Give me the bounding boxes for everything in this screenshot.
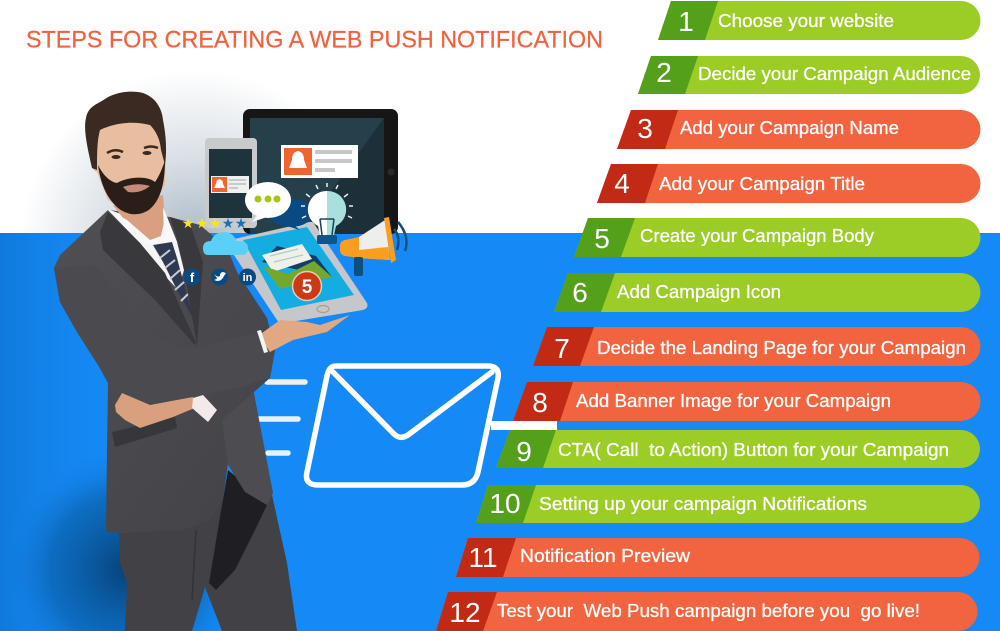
step 1: Choose your website <box>718 10 894 31</box>
icon: light bulb <box>301 183 353 244</box>
step 11: 11 <box>468 542 498 573</box>
trouser shadow <box>209 470 267 590</box>
jacket pocket flap <box>112 417 177 447</box>
head: eyes and brows <box>107 146 158 153</box>
jacket back tail <box>218 388 273 505</box>
step 11: Notification Preview <box>520 545 691 566</box>
head: beard <box>98 160 165 214</box>
step 7 <box>533 327 980 366</box>
rating stars <box>182 215 247 231</box>
jacket lapels <box>100 212 203 345</box>
step 1: 1 <box>678 6 694 37</box>
step 7: Decide the Landing Page for your Campaign <box>597 337 966 358</box>
step 8: Add Banner Image for your Campaign <box>576 390 891 411</box>
step 2 <box>638 56 980 94</box>
trousers <box>119 495 297 631</box>
social icons: f <box>190 270 195 285</box>
step 4: 4 <box>614 168 630 199</box>
step 12: Test your Web Push campaign before you go live! <box>497 600 920 621</box>
step 5: Create your Campaign Body <box>640 225 875 246</box>
step 4 <box>597 164 980 203</box>
step 12: 12 <box>449 597 481 628</box>
step 9 <box>496 430 980 468</box>
icon: tablet with envelope: 5 <box>302 277 313 298</box>
trouser crease <box>192 530 196 600</box>
step 1 <box>658 1 980 40</box>
icon: dark tablet <box>243 109 398 234</box>
background: white upper area <box>0 0 1000 233</box>
social icons: in <box>243 272 253 284</box>
step 12 <box>436 592 978 631</box>
speed lines <box>259 382 305 453</box>
step 5 <box>574 218 980 257</box>
icon: speech bubble <box>245 182 313 230</box>
shirt collar <box>107 207 184 290</box>
icon: large envelope with speed lines <box>259 366 557 485</box>
rating stars: ★ <box>196 215 208 231</box>
step 5: 5 <box>594 223 610 254</box>
step 9: CTA( Call to Action) Button for your Campaign <box>558 439 949 460</box>
title: STEPS FOR CREATING A WEB PUSH NOTIFICATION <box>26 26 603 54</box>
hand holding tablet <box>262 315 350 352</box>
step 6: 6 <box>572 277 588 308</box>
step 2: Decide your Campaign Audience <box>698 63 971 84</box>
rating stars: ★ <box>222 215 234 231</box>
step 3 <box>617 110 980 149</box>
collar fold <box>107 207 177 245</box>
rating stars: ★ <box>209 215 221 231</box>
step 10: 10 <box>489 488 521 519</box>
background: left edge dimming <box>0 233 130 631</box>
step 8: 8 <box>532 387 548 418</box>
icon: tablet with envelope <box>227 222 368 323</box>
man in suit <box>54 92 350 631</box>
striped tie <box>153 242 193 318</box>
step 9: 9 <box>516 436 532 467</box>
connector line <box>491 421 557 430</box>
envelope body <box>306 366 498 485</box>
step 10 <box>476 485 980 523</box>
background: blue lower band <box>0 233 1000 631</box>
step 3: Add your Campaign Name <box>680 117 899 138</box>
head: lips <box>123 184 150 192</box>
envelope flap <box>333 372 492 437</box>
step 8 <box>513 382 980 421</box>
resting hand <box>115 393 197 428</box>
social icons <box>184 268 256 286</box>
step 11 <box>456 538 980 577</box>
step 3: 3 <box>637 113 653 144</box>
folded arm sleeve <box>54 265 275 404</box>
step 10: Setting up your campaign Notifications <box>539 493 867 514</box>
shirt cuff at hand <box>192 395 217 422</box>
jacket body <box>54 210 275 533</box>
step 6: Add Campaign Icon <box>617 281 781 302</box>
step 4: Add your Campaign Title <box>659 173 865 194</box>
neck <box>113 195 165 240</box>
shirt cuff at wrist <box>257 330 268 353</box>
rating stars: ★ <box>235 215 247 231</box>
head: face <box>92 118 166 214</box>
head: hair <box>85 92 166 170</box>
rating stars: ★ <box>182 215 194 231</box>
icon: megaphone <box>340 217 406 276</box>
step 2: 2 <box>656 57 672 88</box>
step 7: 7 <box>554 333 570 364</box>
background: grey haze behind man <box>0 60 400 233</box>
illustration: devices and marketing icons <box>205 109 406 323</box>
icon: cloud <box>203 232 248 255</box>
background: shadow behind man <box>0 420 300 631</box>
step 6 <box>554 273 980 312</box>
icon: phone <box>205 138 257 228</box>
